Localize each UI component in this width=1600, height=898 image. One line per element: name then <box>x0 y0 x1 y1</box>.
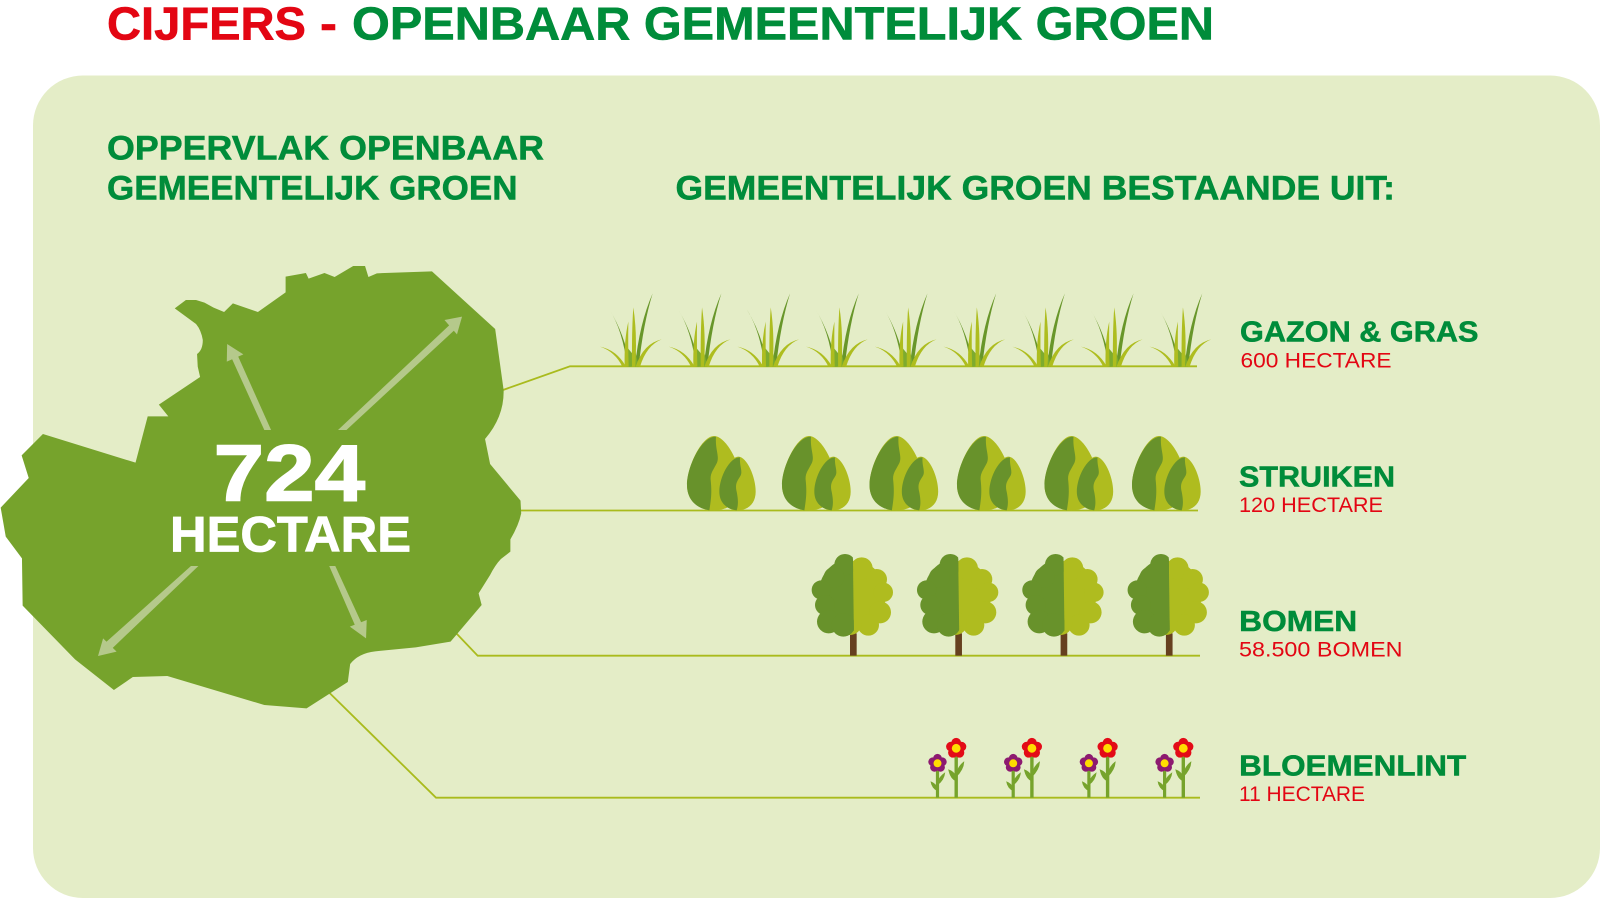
map unit: HECTARE <box>170 507 411 563</box>
row: trees <box>812 554 1402 662</box>
value: bloemenlint: 11 HECTARE <box>1239 783 1365 806</box>
heading: oppervlak: GEMEENTELIJK GROEN <box>107 169 518 207</box>
label: bloemenlint: BLOEMENLINT <box>1239 750 1466 782</box>
arrows on map <box>98 317 462 656</box>
value: gazon: 600 HECTARE <box>1240 349 1392 372</box>
heading: oppervlak <box>107 129 544 207</box>
value: struiken: 120 HECTARE <box>1239 494 1383 517</box>
label: struiken: STRUIKEN <box>1239 462 1395 494</box>
label: bomen: BOMEN <box>1239 606 1357 638</box>
row: shrubs <box>687 436 1395 517</box>
value: bomen: 58.500 BOMEN <box>1239 639 1402 662</box>
icons: trees <box>812 554 1209 656</box>
row: flowers <box>928 738 1466 806</box>
connector lines <box>330 366 1200 798</box>
row: grass <box>600 293 1478 372</box>
map value: 724 <box>214 428 366 518</box>
heading: bestaande uit: GEMEENTELIJK GROEN BESTAANDE UIT: <box>676 169 1395 207</box>
icons: shrubs <box>687 436 1201 510</box>
icons: flowers <box>928 738 1193 798</box>
map: municipality <box>1 266 521 708</box>
icons: grass <box>600 293 1211 367</box>
label: gazon: GAZON & GRAS <box>1240 317 1478 349</box>
heading: oppervlak: OPPERVLAK OPENBAAR <box>107 129 544 167</box>
